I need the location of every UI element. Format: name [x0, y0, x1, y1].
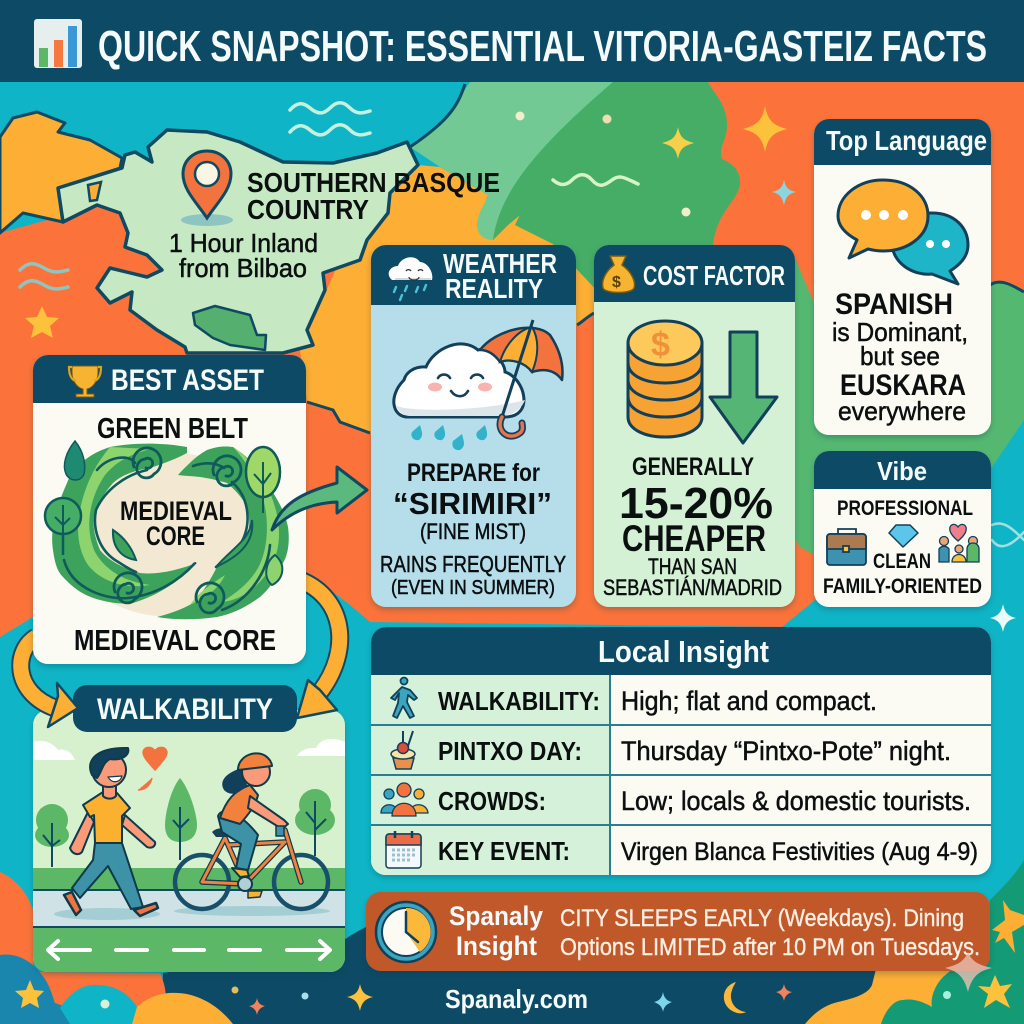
row: key event: [386, 831, 978, 868]
icon: coin stack: [628, 321, 702, 437]
heading: [443, 248, 557, 304]
panel: walkability: [33, 685, 345, 972]
panel: spanaly insight: [366, 892, 990, 971]
text: medieval core: MEDIEVAL CORE: [74, 625, 276, 657]
text: prepare for sirimiri: (FINE MIST): [420, 519, 526, 544]
text: prepare for sirimiri: [380, 459, 566, 599]
icon: dark tree: [64, 441, 85, 480]
heading pill: [73, 685, 297, 732]
arrows: path direction: [48, 941, 330, 959]
text: insight message: [560, 905, 980, 961]
panel: local insight table: [371, 627, 991, 875]
Basque Country map: [58, 130, 418, 353]
panel: weather reality: [371, 245, 576, 607]
icon: walking man: [64, 748, 158, 916]
text: medieval core inner: [120, 496, 232, 551]
location text: 1 Hour Inland: [169, 228, 318, 258]
icon: cloud with umbrella: [394, 320, 562, 450]
arrow: price down: [710, 332, 777, 443]
icon: left tree: [45, 498, 81, 555]
icon: map pin: [181, 151, 233, 226]
icon: right tree: [246, 447, 280, 513]
row: walkability: WALKABILITY:: [438, 686, 600, 716]
text: cost comparison: 15-20%: [619, 479, 773, 528]
heading: Vibe: [877, 456, 927, 486]
text: family oriented: FAMILY-ORIENTED: [823, 575, 982, 598]
text: language description: [832, 288, 968, 426]
heading: BEST ASSET: [111, 364, 264, 397]
arrow: best asset to walkability right: [297, 580, 340, 718]
row: crowds: [381, 783, 971, 816]
heading: REALITY: [445, 273, 543, 304]
icon: coin stack: $: [651, 326, 670, 364]
icon: bar chart: [34, 19, 82, 68]
icon: family: [939, 524, 979, 562]
arrow: green belt to weather: [272, 467, 367, 530]
text: prepare for sirimiri: PREPARE for: [407, 459, 540, 487]
text: medieval core inner: CORE: [146, 521, 205, 551]
text: green belt: GREEN BELT: [97, 413, 248, 445]
text: prepare for sirimiri: “SIRIMIRI”: [393, 486, 552, 521]
icon: money bag: $: [612, 274, 621, 291]
chart: green belt around core: [45, 441, 289, 619]
text: prepare for sirimiri: RAINS FREQUENTLY: [380, 551, 566, 577]
row: crowds: Low; locals & domestic tourists.: [621, 786, 971, 816]
icon: heart: [138, 747, 167, 790]
icon: small island: [88, 182, 101, 201]
icon: briefcase: [827, 529, 866, 565]
text: professional: PROFESSIONAL: [837, 497, 973, 520]
icon: small cloud: [389, 257, 432, 300]
row: key event: KEY EVENT:: [438, 836, 570, 866]
text: cost comparison: GENERALLY: [632, 453, 754, 481]
panel: best asset: [33, 355, 306, 664]
text: insight message: CITY SLEEPS EARLY (Weekdays). Dining: [560, 905, 964, 932]
icon: translucent sparkle: [945, 952, 992, 992]
heading: WEATHER: [443, 248, 557, 279]
row: pintxo day: [391, 731, 951, 769]
text: cost comparison: THAN SAN: [648, 554, 737, 579]
heading: COST FACTOR: [643, 260, 785, 291]
icon: cyclist on bicycle: [175, 753, 328, 909]
row: walkability: High; flat and compact.: [621, 686, 877, 716]
text: cost comparison: CHEAPER: [622, 518, 766, 559]
text: language description: SPANISH: [835, 288, 953, 321]
text: medieval core inner: MEDIEVAL: [120, 496, 232, 526]
location text: SOUTHERN BASQUE: [247, 167, 500, 198]
footer website: Spanaly.com: [445, 984, 588, 1014]
title bar: [0, 0, 1024, 82]
icon: speech bubbles: [838, 180, 968, 284]
row: pintxo day: PINTXO DAY:: [438, 736, 582, 766]
label: spanaly insight: Insight: [456, 931, 537, 961]
text: clean: CLEAN: [873, 550, 931, 573]
heading pill: WALKABILITY: [97, 693, 273, 726]
text: language description: is Dominant,: [832, 317, 968, 347]
heading: Local Insight: [598, 634, 769, 669]
heading: Top Language: [826, 125, 987, 156]
panel: cost factor: [594, 245, 795, 607]
text: cost comparison: SEBASTIÁN/MADRID: [603, 575, 782, 600]
label: spanaly insight: [449, 901, 543, 961]
text: cost comparison: [603, 453, 782, 600]
icon: clock: [376, 902, 436, 962]
location text: [169, 167, 500, 283]
arrow: best asset to walkability left: [21, 637, 78, 727]
row: crowds: CROWDS:: [438, 786, 546, 816]
text: language description: EUSKARA: [840, 369, 966, 402]
icon: small leaf: [266, 555, 282, 585]
text: prepare for sirimiri: (EVEN IN SUMMER): [391, 577, 555, 599]
text: language description: everywhere: [838, 396, 966, 426]
panel: vibe: [814, 451, 991, 607]
panel: top language: [814, 119, 991, 435]
text: insight message: Options LIMITED after 10 PM on Tuesdays.: [560, 934, 980, 961]
row: pintxo day: Thursday “Pintxo-Pote” night.: [621, 736, 951, 766]
icon: trees: [35, 778, 335, 867]
icon: clouds: [33, 739, 345, 760]
label: spanaly insight: Spanaly: [449, 901, 543, 931]
icon: diamond: [889, 525, 918, 547]
text: language description: but see: [860, 341, 940, 371]
icon: money bag: [603, 256, 634, 292]
location text: COUNTRY: [247, 194, 369, 225]
row: walkability: [391, 678, 877, 718]
location text: from Bilbao: [179, 253, 307, 283]
icon: trophy: [69, 366, 101, 397]
icon: green lake: [193, 306, 266, 350]
row: key event: Virgen Blanca Festivities (Aug 4-9): [621, 838, 978, 866]
